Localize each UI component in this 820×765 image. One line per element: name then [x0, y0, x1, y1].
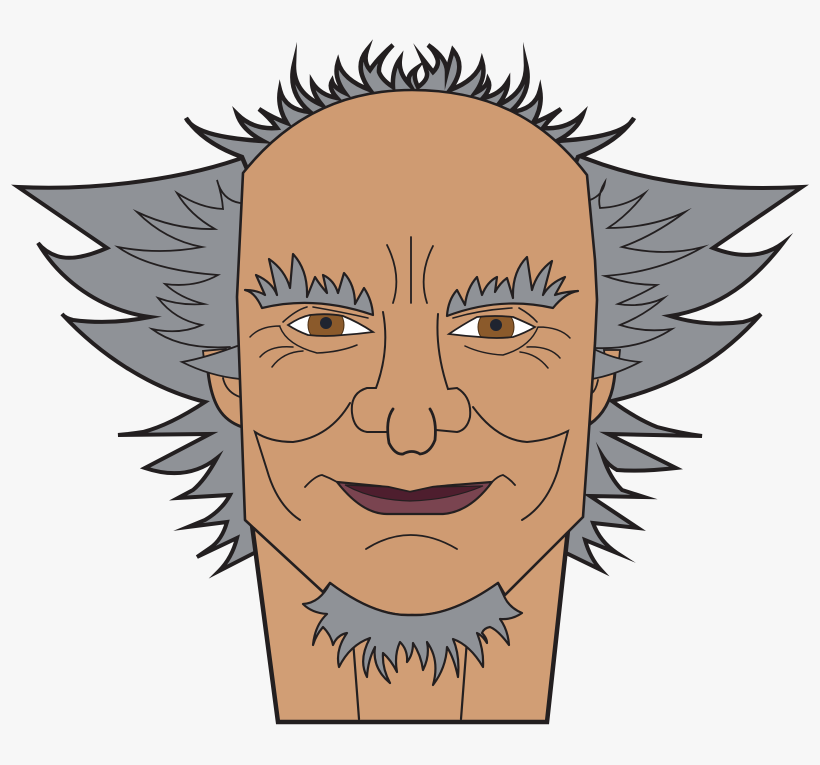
right eyebrow — [447, 257, 578, 316]
hair: top crown — [186, 45, 634, 200]
left eyebrow — [245, 254, 373, 315]
upper lip — [345, 485, 483, 501]
eye wrinkles — [250, 326, 570, 368]
nose tip — [388, 409, 435, 454]
nose — [352, 312, 470, 432]
left inner hair strands — [118, 180, 240, 347]
head and face shape — [237, 90, 597, 615]
goatee — [303, 583, 522, 685]
left eye — [282, 306, 376, 337]
hair: left side — [18, 150, 300, 571]
forehead wrinkles — [387, 237, 433, 303]
right ear — [585, 348, 640, 424]
right inner hair strands — [590, 182, 703, 348]
right hair tuft over ear — [592, 348, 640, 379]
right eye — [446, 307, 538, 339]
left ear — [182, 345, 245, 427]
left hair tuft over ear — [182, 345, 240, 379]
hair: right side — [530, 150, 802, 570]
smile folds — [255, 403, 568, 520]
mouth — [305, 475, 515, 514]
neck — [252, 525, 568, 722]
neck tendons — [353, 640, 467, 719]
chin crease — [366, 535, 457, 549]
